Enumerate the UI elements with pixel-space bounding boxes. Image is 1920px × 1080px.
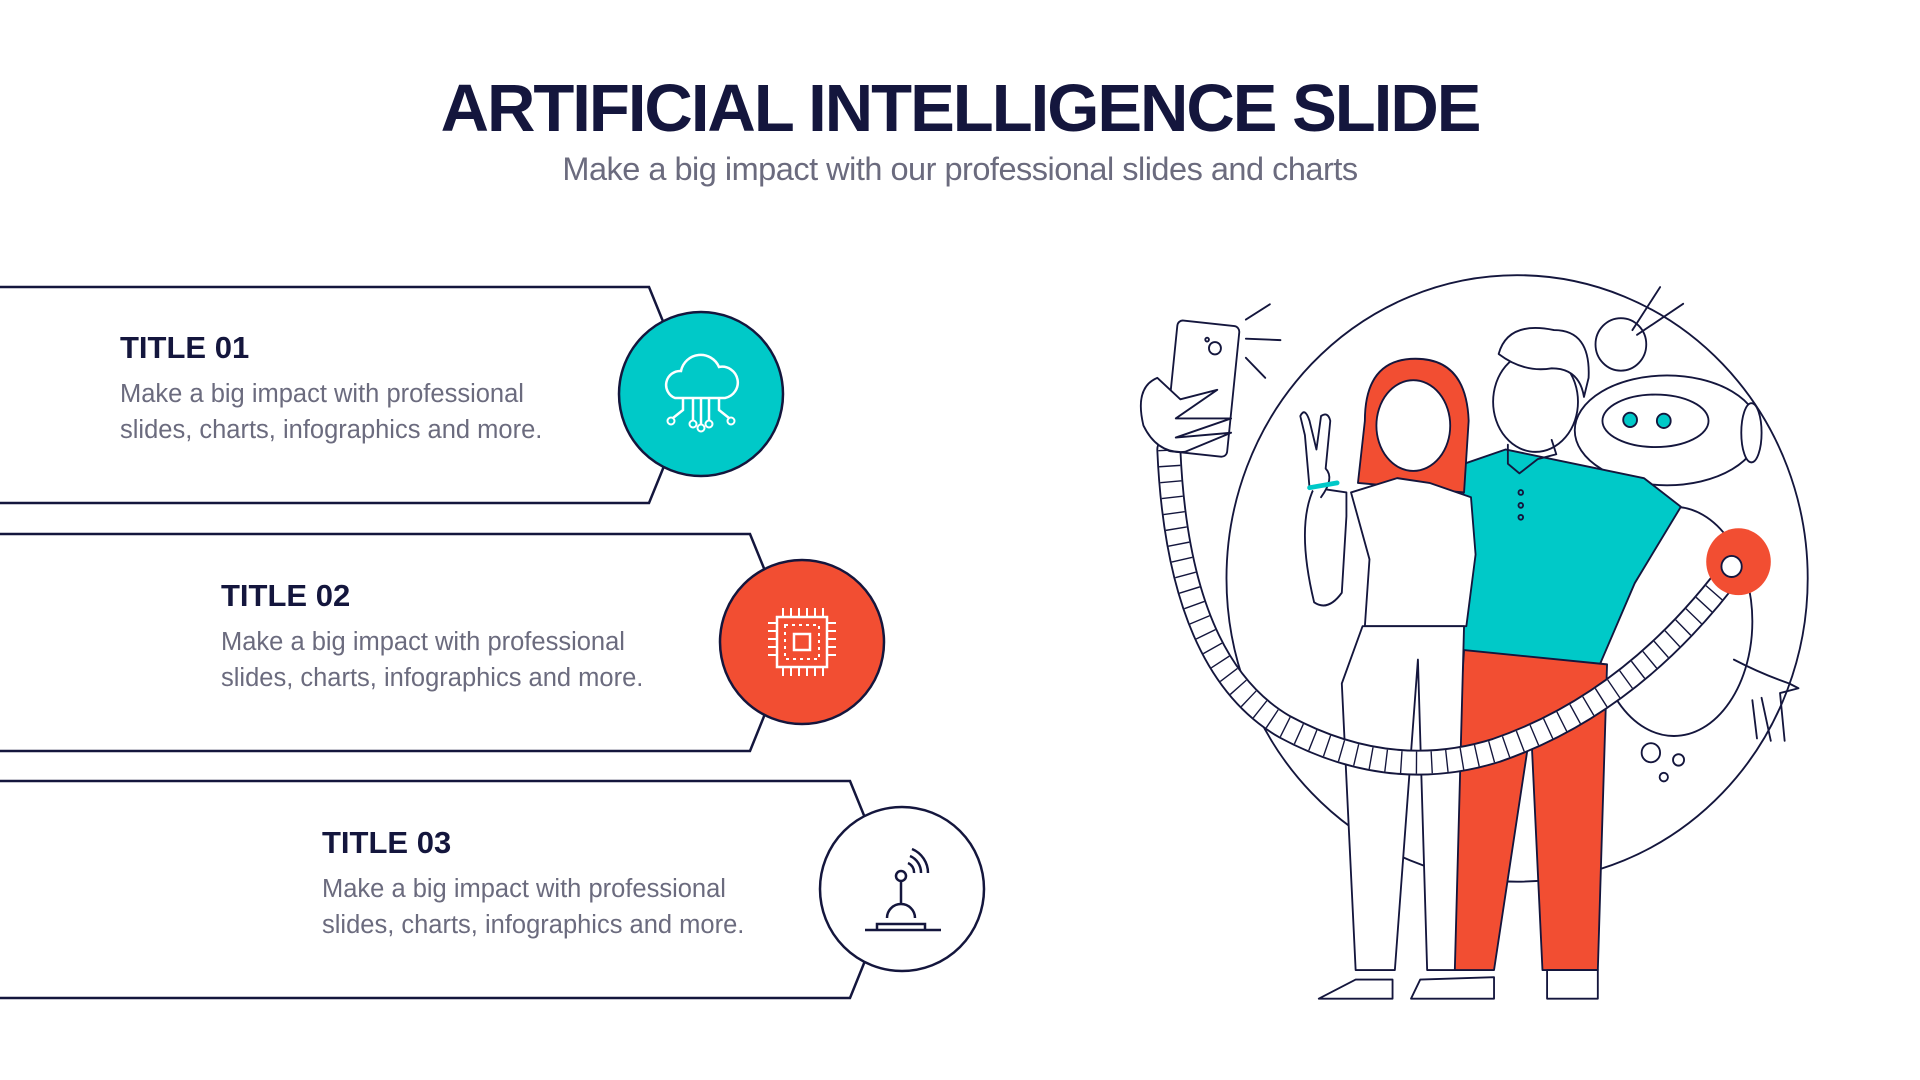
shoes [1319, 970, 1598, 999]
text 1 [120, 330, 542, 444]
icon: chip circle [720, 560, 884, 724]
man pants [1443, 650, 1607, 970]
text 3: TITLE 03 [322, 825, 451, 860]
text 2 [221, 578, 643, 692]
icon: antenna circle [820, 807, 984, 971]
text 1: slides, charts, infographics and more. [120, 416, 542, 444]
man head [1493, 328, 1589, 520]
text 2: Make a big impact with professional [221, 628, 625, 656]
panel 3 [0, 781, 984, 998]
woman pants [1342, 626, 1464, 970]
text 3: Make a big impact with professional [322, 875, 726, 903]
robot hand [1141, 378, 1231, 452]
phone [1165, 304, 1280, 457]
text 1: TITLE 01 [120, 330, 249, 365]
subtitle: Make a big impact with our professional slides and charts [562, 151, 1358, 187]
robot body [1596, 507, 1752, 736]
text 3 [322, 825, 744, 939]
text 1: Make a big impact with professional [120, 380, 524, 408]
robot top hand [1596, 287, 1683, 371]
woman face [1376, 380, 1450, 471]
woman arm [1305, 488, 1346, 605]
robot head [1575, 375, 1762, 485]
woman hair [1358, 359, 1469, 492]
icon: cloud circle [619, 312, 783, 476]
text 3: slides, charts, infographics and more. [322, 911, 744, 939]
panel 2 [0, 534, 884, 751]
big circle [1226, 275, 1808, 882]
bubbles [1642, 743, 1660, 762]
title: ARTIFICIAL INTELLIGENCE SLIDE [441, 71, 1479, 146]
illustration [1140, 274, 1809, 1000]
text 2: TITLE 02 [221, 578, 350, 613]
panel 1 [0, 287, 783, 503]
woman body [1351, 478, 1476, 626]
text 2: slides, charts, infographics and more. [221, 664, 643, 692]
man shirt [1459, 449, 1681, 669]
robot arm tube [1169, 449, 1736, 763]
red joint [1706, 528, 1771, 595]
